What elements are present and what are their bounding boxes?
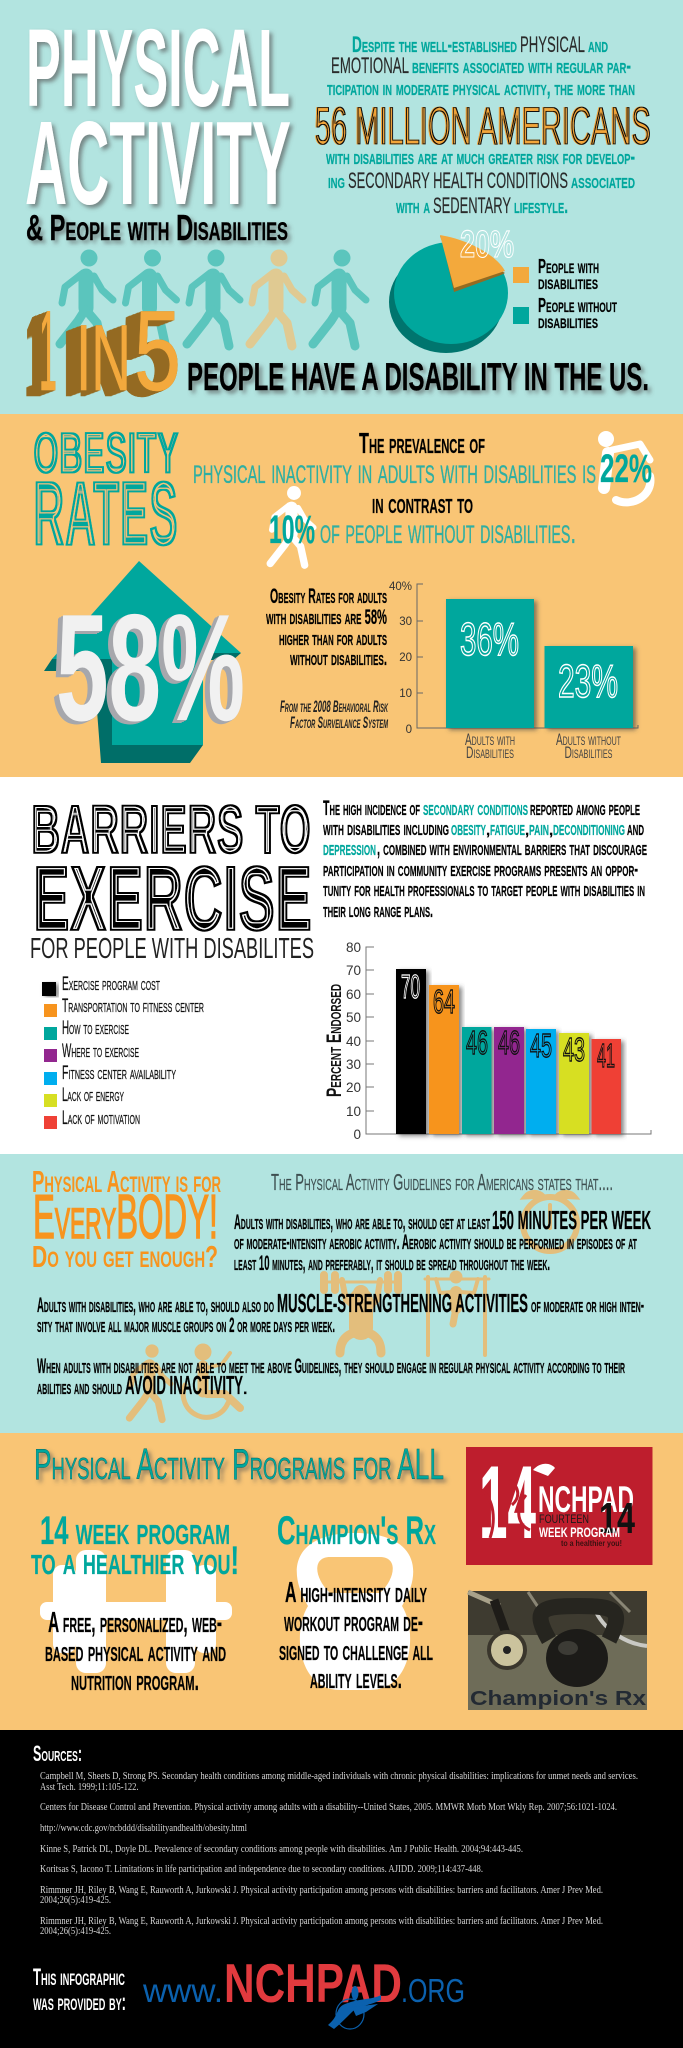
legend: barriers: Lack of motivation — [62, 1108, 140, 1129]
obesity text: higher than for adults — [279, 627, 387, 650]
panel: obesity rates: Factor Surveilance System — [290, 713, 388, 732]
heading: everybody: Physical Activity is for — [32, 1164, 221, 1199]
badge: 14 week program logo — [466, 1445, 652, 1565]
legend: barriers: Where to exercise — [62, 1041, 139, 1062]
guideline: muscle strengthening — [37, 1288, 644, 1337]
guideline: aerobic activity — [234, 1205, 651, 1275]
reference list: 2004;26(5):419-425. — [40, 1895, 111, 1906]
reference list: Asst Tech. 1999;11:105-122. — [40, 1782, 138, 1793]
heading: everybody: EveryBODY! — [33, 1183, 218, 1252]
bar: lack of energy — [559, 1031, 589, 1134]
intro paragraph: SEDENTARY — [433, 193, 511, 218]
panel: barriers to exercise — [0, 777, 683, 1154]
heading: everybody — [32, 1164, 221, 1274]
subtitle: & People with Disabilities — [26, 207, 288, 248]
intro paragraph: and — [588, 32, 608, 57]
legend: barriers — [42, 974, 204, 1129]
reference list: Koritsas S, Iacono T. Limitations in life participation and independence due to secondary conditions. AJIDD. 2009;114:437-448. — [40, 1864, 483, 1875]
bar chart: obesity rates: 20 — [399, 652, 412, 664]
bar: fitness center availability: 45 — [530, 1027, 552, 1064]
paragraph: secondary conditions: deconditioning — [553, 817, 625, 840]
reference list: Rimmner JH, Riley B, Wang E, Rauworth A, Jurkowski J. Physical activity participation among persons with disabilities: barriers and facilitators. Amer J Prev Med. — [40, 1916, 603, 1927]
heading: obesity rates: OBESITY — [33, 421, 179, 486]
program: champion's rx: Champion's Rx — [277, 1509, 436, 1553]
subheading: FOR PEOPLE WITH DISABILITES — [30, 933, 314, 965]
title: Physical Activity — [25, 7, 291, 230]
program: 14 week: nutrition program. — [71, 1665, 199, 1697]
reference list: 2004;26(5):419-425. — [40, 1926, 111, 1937]
program: champion's rx: signed to challenge all — [279, 1635, 433, 1667]
credit text — [33, 1964, 126, 2016]
pie legend — [513, 256, 617, 333]
panel: guidelines — [0, 1154, 683, 1433]
icon: alarm clock — [523, 1192, 577, 1251]
bar chart: percent endorsed: 70 — [346, 963, 361, 978]
big stat: 58%: 58% — [56, 583, 245, 753]
panel: obesity rates: From the 2008 Behavioral Risk — [280, 697, 389, 716]
bar chart: obesity rates — [389, 581, 638, 762]
bar chart: obesity rates: 30 — [399, 616, 412, 628]
bar: exercise program cost: 70 — [401, 968, 420, 1005]
bar chart: percent endorsed: 50 — [346, 1010, 361, 1025]
bar: 36%: 36% — [460, 613, 519, 665]
panel: programs — [0, 1433, 683, 1730]
program: champion's rx — [277, 1509, 436, 1695]
panel: sources and credit — [0, 1730, 683, 2048]
paragraph: secondary conditions: fatigue — [490, 817, 525, 840]
axis labels: Disabilities — [564, 743, 612, 762]
stat: 22%: 22% — [600, 447, 652, 491]
pie legend: People with — [538, 256, 599, 278]
pie label: 20%: 20% — [460, 224, 514, 266]
bar: transportation: 64 — [433, 983, 455, 1020]
bar: lack of motivation — [592, 1037, 621, 1134]
legend: barriers: Fitness center availability — [62, 1063, 176, 1084]
intro paragraph: EMOTIONAL — [331, 53, 409, 78]
bar chart: percent endorsed — [323, 940, 651, 1142]
panel: obesity rates — [0, 414, 683, 777]
guideline: avoid inactivity — [37, 1355, 625, 1400]
icon: weightlifter — [324, 1275, 398, 1353]
bar: 36% — [446, 599, 534, 728]
heading: everybody: Do you get enough? — [32, 1239, 218, 1274]
heading: barriers to exercise — [31, 791, 312, 950]
program: champion's rx: ability levels. — [310, 1663, 402, 1695]
bar: where to exercise: 46 — [498, 1024, 520, 1061]
pie legend: disabilities — [538, 311, 598, 333]
badge: 14 week program logo: WEEK PROGRAM — [539, 1524, 620, 1540]
program: 14 week: 14 week program — [40, 1509, 230, 1553]
bar chart: percent endorsed: 20 — [346, 1080, 361, 1095]
icon row: five walking people — [60, 250, 366, 346]
inactivity statement: in contrast to — [372, 488, 473, 520]
paragraph: secondary conditions: and — [627, 817, 644, 840]
bar chart: obesity rates: 0 — [406, 724, 412, 736]
panel: intro — [0, 0, 683, 415]
bar chart: percent endorsed: 0 — [353, 1127, 361, 1142]
axis labels — [465, 730, 621, 762]
intro paragraph — [314, 32, 650, 218]
panel: intro: PHYSICAL — [26, 7, 290, 130]
program: champion's rx: workout program de- — [284, 1606, 423, 1638]
legend: barriers: Transportation to fitness center — [62, 996, 204, 1017]
inactivity statement — [193, 428, 652, 552]
1 in 5 block text — [39, 288, 181, 415]
paragraph: secondary conditions: , — [486, 822, 490, 839]
logo: nchpad — [142, 1952, 465, 2029]
bar: 23%: 23% — [558, 655, 618, 707]
heading: sources: Sources: — [33, 1741, 82, 1766]
guideline: avoid inactivity: AVOID INACTIVITY — [125, 1370, 243, 1400]
guideline: muscle strengthening: Adults with disabilities, who are able to, should also do — [37, 1294, 274, 1317]
inactivity statement: The prevalence of — [359, 428, 485, 460]
intro paragraph: associated — [571, 168, 635, 193]
bar: how to exercise — [462, 1024, 492, 1134]
panel: intro: ACTIVITY — [25, 97, 291, 230]
axis labels: Disabilities — [466, 743, 514, 762]
bar chart: obesity rates: 10 — [399, 688, 412, 700]
badge: 14 week program logo: FOURTEEN — [539, 1514, 589, 1526]
icon: kettlebell — [297, 1533, 413, 1690]
panel: obesity rates: RATES — [33, 463, 178, 565]
paragraph: secondary conditions: , — [549, 822, 553, 839]
guideline: avoid inactivity: . — [243, 1381, 247, 1398]
paragraph: secondary conditions: The high incidence of — [323, 797, 420, 820]
image: kettlebell and wheelchair photo: Champion's Rx — [470, 1688, 646, 1710]
obesity text: Obesity Rates for adults — [270, 585, 387, 608]
legend: barriers: How to exercise — [62, 1018, 129, 1039]
logo: nchpad: NCHPAD — [224, 1952, 402, 2014]
obesity text: with disabilities are 58% — [266, 606, 387, 629]
credit text: was provided by: — [33, 1989, 126, 2016]
intro paragraph: PHYSICAL — [520, 32, 585, 57]
obesity text: without disabilities. — [290, 647, 387, 670]
intro paragraph: with a — [396, 193, 430, 218]
legend: barriers: Exercise program cost — [62, 974, 160, 995]
bar chart: percent endorsed: 30 — [346, 1057, 361, 1072]
stat: 10%: 10% — [269, 508, 315, 552]
legend: barriers: Lack of energy — [62, 1085, 124, 1106]
intro paragraph: Despite the well-established — [352, 32, 517, 57]
paragraph: secondary conditions — [323, 797, 647, 922]
icon: walking person and wheelchair user — [129, 1344, 240, 1420]
logo: nchpad: .ORG — [401, 1972, 465, 2009]
paragraph: secondary conditions: with disabilities including — [323, 817, 449, 840]
bar: fitness center availability — [526, 1027, 556, 1134]
paragraph: secondary conditions: pain — [529, 817, 549, 840]
reference list: Kinne S, Patrick DL, Doyle DL. Prevalence of secondary conditions among people with disabilities. Am J Public Health. 2004;94:443-445. — [40, 1844, 523, 1855]
badge: 14 week program logo: to a healthier you! — [561, 1538, 622, 1548]
source note — [280, 697, 389, 732]
intro paragraph: lifestyle. — [514, 193, 568, 218]
paragraph: secondary conditions: secondary conditions — [423, 797, 528, 820]
obesity text — [266, 585, 387, 670]
badge: 14 week program logo: 14 — [599, 1494, 635, 1543]
program: champion's rx: A high-intensity daily — [285, 1577, 427, 1609]
1 in 5 block text: 5 — [134, 288, 181, 415]
paragraph: secondary conditions: obesity — [451, 817, 486, 840]
icon: up arrow — [44, 561, 241, 763]
bar: where to exercise — [494, 1024, 524, 1134]
heading: obesity rates — [33, 421, 179, 565]
bar chart: percent endorsed: 60 — [346, 987, 361, 1002]
icon: pull-up person — [425, 1270, 489, 1355]
bar: lack of motivation: 41 — [597, 1037, 615, 1074]
bar chart: percent endorsed: 80 — [346, 940, 361, 955]
heading: barriers to exercise: BARRIERS TO — [31, 791, 311, 868]
badge: 14 week program logo: 14 — [479, 1445, 536, 1561]
bar: how to exercise: 46 — [466, 1024, 488, 1061]
program: 14 week — [31, 1509, 239, 1697]
axis labels: Adults with — [465, 730, 515, 749]
1 in 5 block text: IN — [76, 305, 131, 410]
program: 14 week: based physical activity and — [45, 1636, 226, 1668]
image: kettlebell and wheelchair photo — [468, 1591, 647, 1710]
bar: lack of energy: 43 — [563, 1031, 585, 1068]
paragraph: secondary conditions: their long range plans. — [323, 899, 433, 922]
icon: wheelchair user — [598, 431, 650, 502]
intro paragraph: ing — [328, 168, 345, 193]
icon: walking person — [270, 486, 314, 565]
pie legend: disabilities — [538, 272, 598, 294]
bar chart: obesity rates: 40% — [389, 581, 412, 593]
credit text: This infographic — [33, 1964, 125, 1991]
reference list: http://www.cdc.gov/ncbddd/disabilityandhealth/obesity.html — [40, 1823, 247, 1834]
bar: exercise program cost — [396, 968, 426, 1134]
logo: nchpad: www. — [142, 1972, 223, 2009]
paragraph: secondary conditions: depression — [323, 837, 376, 860]
guideline: muscle strengthening: sity that involve all major muscle groups on 2 or more days per week. — [37, 1314, 335, 1337]
bar: transportation — [429, 983, 459, 1134]
icon: dumbbell — [40, 1550, 232, 1673]
paragraph: secondary conditions: , — [525, 822, 529, 839]
axis labels: Adults without — [556, 730, 621, 749]
bar chart: percent endorsed: 40 — [346, 1034, 361, 1049]
1 in 5 block text: 1 — [39, 288, 57, 415]
axis title: Percent Endorsed — [323, 984, 346, 1097]
program: 14 week: A free, personalized, web- — [48, 1607, 222, 1639]
reference list — [40, 1771, 638, 1937]
heading: barriers to exercise: EXERCISE — [33, 848, 312, 950]
reference list: Rimmner JH, Riley B, Wang E, Rauworth A, Jurkowski J. Physical activity participation among persons with disabilities: barriers and facilitators. Amer J Prev Med. — [40, 1885, 603, 1896]
program: 14 week: to a healthier you! — [31, 1539, 239, 1583]
pie legend: People without — [538, 295, 617, 317]
bar: 23% — [544, 646, 633, 728]
guideline: avoid inactivity: abilities and should — [37, 1376, 122, 1399]
pie chart — [389, 224, 514, 353]
bar chart: percent endorsed: 10 — [346, 1104, 361, 1119]
